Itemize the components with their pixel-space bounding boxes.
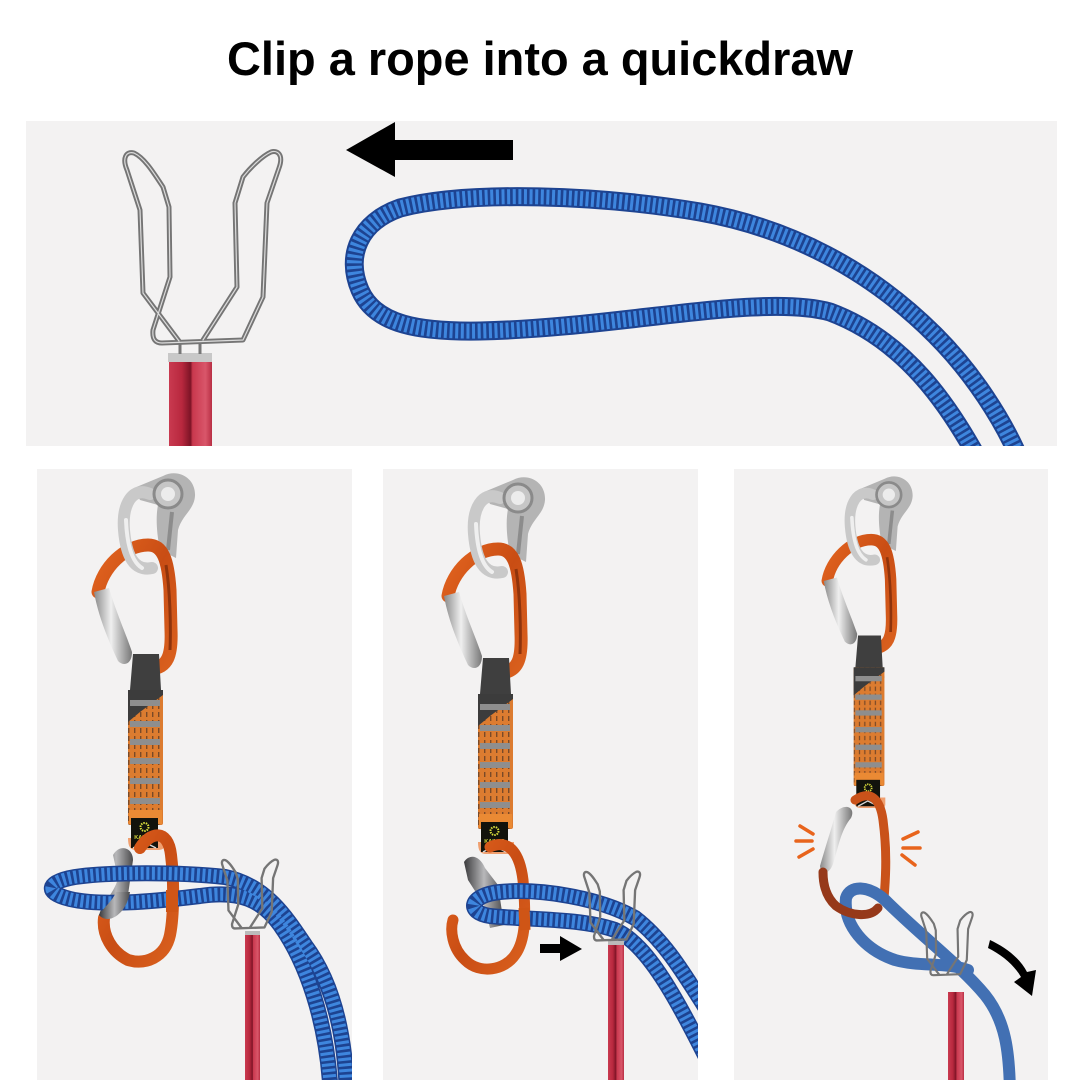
icon: orange click marks right [902,832,920,865]
stick with fork [921,912,973,1080]
blue rope loop [354,197,1024,470]
title: Clip a rope into a quickdraw [227,32,853,85]
carabiner bottom in front of rope [823,872,878,915]
panel background: step 2 [383,469,698,1080]
arrow: move left [346,122,513,177]
panel: clip stick and rope loop [26,121,1057,470]
stick with fork [222,860,278,1080]
panel background: top [26,121,1057,446]
lower carabiner [820,796,886,898]
lower carabiner hooked open [452,845,525,969]
panel background: step 1 [37,469,352,1080]
panel: step 1 rope held beside open carabiner [37,469,352,1080]
stick with fork [584,872,640,1080]
gate bent inward [464,857,504,928]
blue rope through stick [846,888,1010,1080]
quickdraw upper: hanger, carabiner and sling [94,473,195,850]
carabiner parts in front of rope [99,890,172,919]
blue rope through stick [466,883,698,1059]
panel: step 2 gate presses against rope [383,469,720,1080]
panel background: step 3 [734,469,1048,1080]
icon: clipping stick fork [125,152,281,446]
arrow: move right [540,936,582,961]
lower carabiner [99,835,173,962]
blue rope through stick [52,873,347,1080]
carabiner side in front of rope [524,908,525,930]
arrow: curved down-right [988,940,1036,996]
quickdraw upper: hanger, carabiner and sling [824,476,913,808]
panel: step 3 rope snaps into carabiner [734,469,1048,1080]
quickdraw upper: hanger, carabiner and sling [444,477,545,854]
icon: orange click marks left [796,826,813,857]
